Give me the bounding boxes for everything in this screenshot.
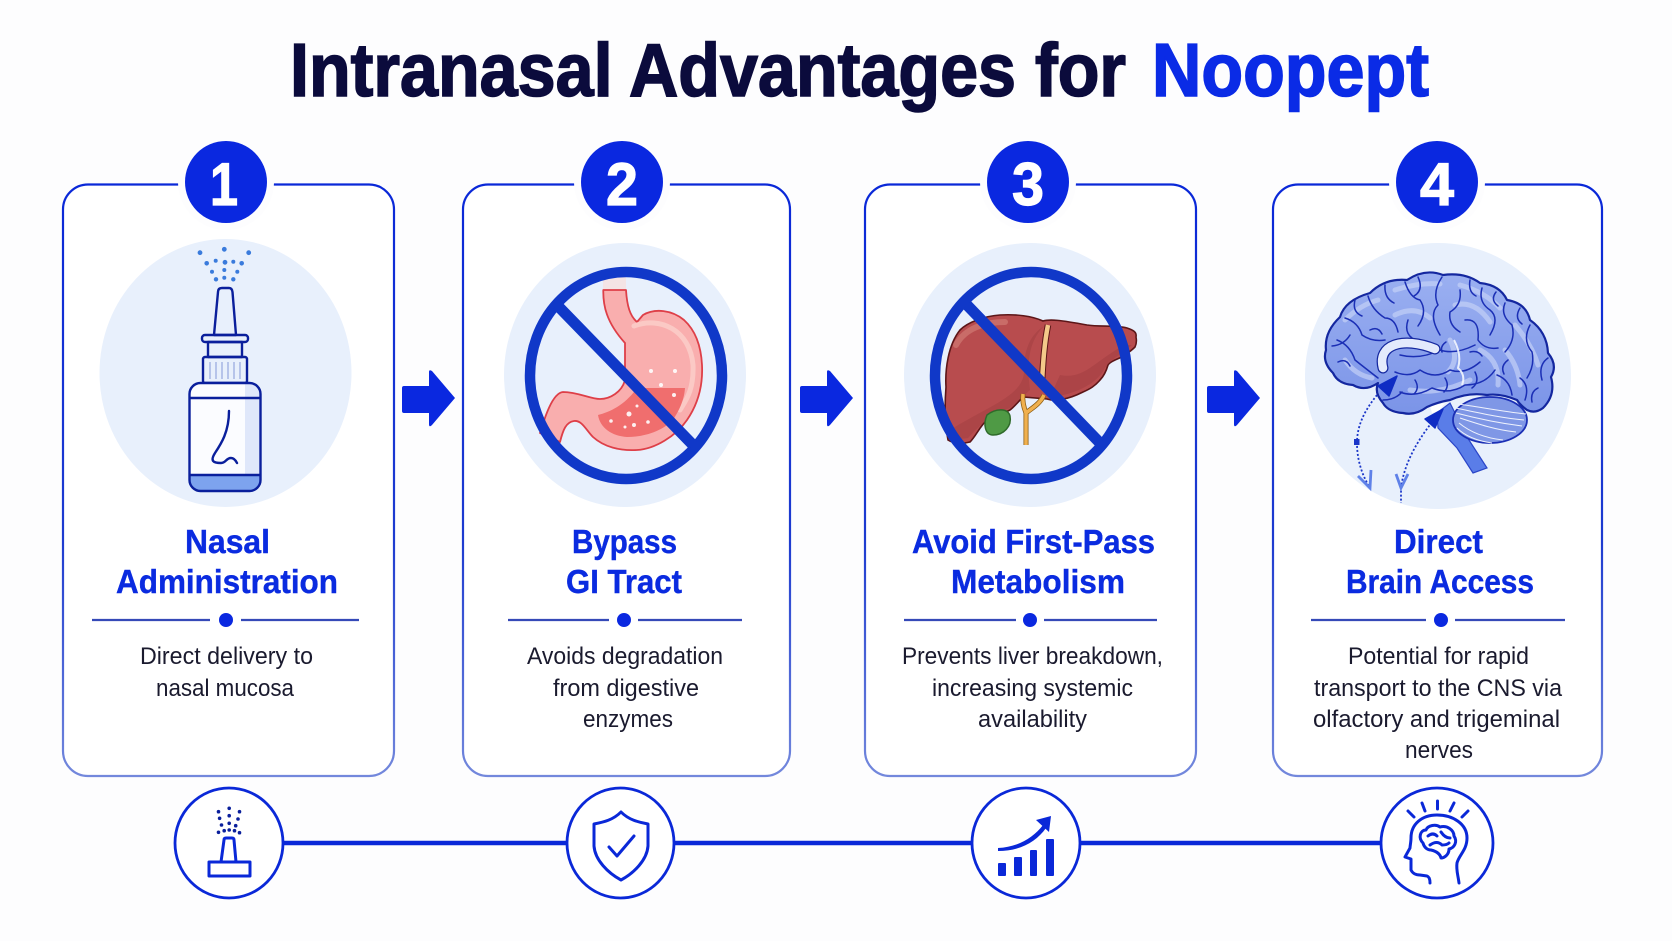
description xyxy=(902,643,1163,733)
description: transport to the CNS via xyxy=(1314,675,1563,702)
heading: Bypass xyxy=(572,523,677,560)
arrow: step 2 to 3 xyxy=(800,370,853,426)
description xyxy=(527,643,723,733)
divider xyxy=(508,613,742,627)
panel: nasal administration xyxy=(63,134,394,776)
number badge 1 xyxy=(178,134,274,230)
heading: Brain Access xyxy=(1346,563,1534,600)
title: Noopept xyxy=(1152,28,1429,112)
panel: bypass GI tract xyxy=(463,134,790,776)
icon: nasal spray bottle xyxy=(100,239,352,507)
bottom connector line xyxy=(283,841,1381,845)
description: olfactory and trigeminal xyxy=(1313,706,1560,733)
description: Prevents liver breakdown, xyxy=(902,643,1163,670)
number badge 4 xyxy=(1389,134,1485,230)
description: Direct delivery to xyxy=(140,643,313,670)
number badge 3: 3 xyxy=(1012,151,1044,218)
icon: bottom spray xyxy=(175,788,283,898)
description: Avoids degradation xyxy=(527,643,723,670)
panel: direct brain access xyxy=(1273,134,1602,776)
description xyxy=(140,643,313,702)
icon: rising bar chart xyxy=(972,788,1080,898)
heading: Nasal xyxy=(185,523,270,560)
description: Potential for rapid xyxy=(1348,643,1529,670)
number badge 3 xyxy=(980,134,1076,230)
description: nerves xyxy=(1405,737,1473,764)
divider xyxy=(92,613,359,627)
heading: GI Tract xyxy=(566,563,682,600)
description: from digestive xyxy=(553,675,699,702)
icon: brain with nerve pathways xyxy=(1305,243,1571,509)
arrow: step 3 to 4 xyxy=(1207,370,1260,426)
description xyxy=(1313,643,1563,764)
heading xyxy=(1346,523,1534,600)
icon: crossed-out stomach xyxy=(504,243,746,507)
number badge 4: 4 xyxy=(1420,151,1455,218)
description: increasing systemic xyxy=(932,675,1133,702)
icon: shield check xyxy=(567,788,674,898)
title: Intranasal Advantages for xyxy=(290,28,1126,112)
icon: crossed-out liver xyxy=(904,243,1156,507)
number badge 2: 2 xyxy=(606,151,638,218)
number badge 2 xyxy=(574,134,670,230)
description: enzymes xyxy=(583,706,673,733)
panel: avoid first-pass metabolism xyxy=(865,134,1196,776)
heading: Metabolism xyxy=(951,563,1125,600)
heading: Direct xyxy=(1394,523,1483,560)
number badge 1: 1 xyxy=(210,151,238,218)
heading: Administration xyxy=(116,563,338,600)
heading: Avoid First-Pass xyxy=(912,523,1155,560)
icon: head with brain xyxy=(1381,788,1493,898)
heading xyxy=(912,523,1155,600)
divider xyxy=(904,613,1157,627)
heading xyxy=(116,523,338,600)
description: nasal mucosa xyxy=(156,675,295,702)
divider xyxy=(1311,613,1565,627)
heading xyxy=(566,523,682,600)
arrow: step 1 to 2 xyxy=(402,370,455,426)
description: availability xyxy=(978,706,1087,733)
